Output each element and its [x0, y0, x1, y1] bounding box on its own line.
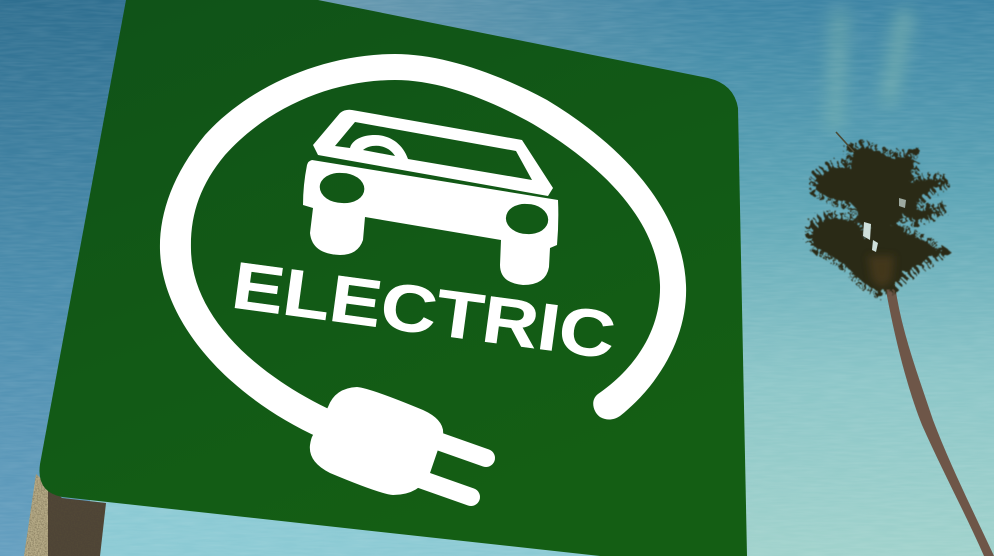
icon: plug — [310, 387, 486, 497]
green sign panel — [39, 0, 747, 556]
palm highlights — [863, 198, 906, 252]
car roof and windscreen — [313, 110, 553, 196]
charging cable ring — [160, 54, 686, 438]
car body — [303, 160, 558, 285]
palm spike — [836, 132, 854, 152]
sign post — [24, 474, 106, 556]
palm tree — [812, 132, 994, 556]
title: ELECTRIC: ELECTRIC — [228, 248, 620, 372]
palm crown — [812, 147, 948, 292]
icon: car — [303, 110, 558, 285]
palm lower tint — [868, 256, 894, 288]
plug body — [310, 387, 443, 495]
palm trunk — [885, 285, 994, 556]
plug prongs — [420, 440, 486, 497]
